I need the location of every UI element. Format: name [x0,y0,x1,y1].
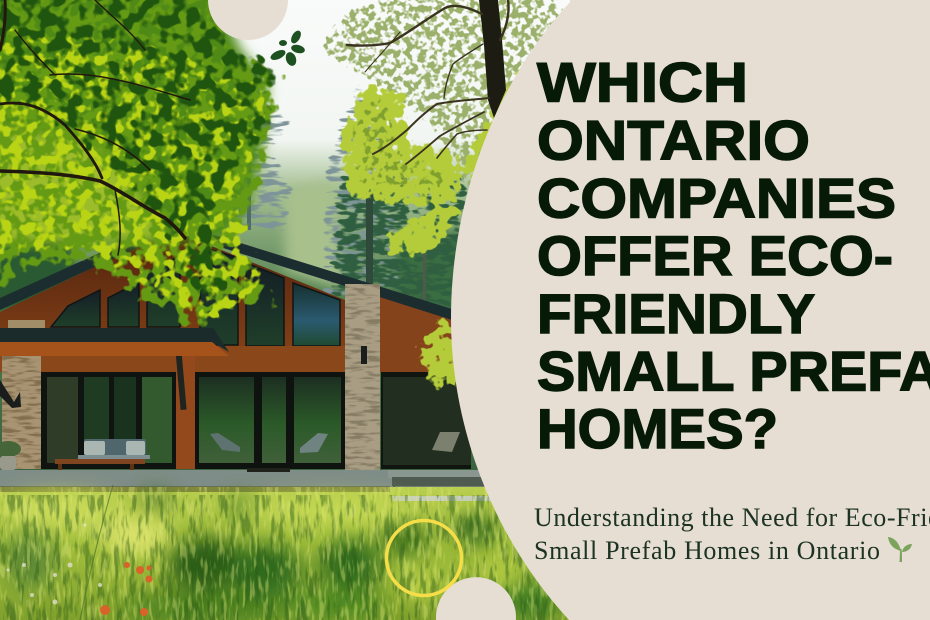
house: column bracket [175,350,187,410]
photo: sky and forest background [0,0,570,500]
house: overhang soffit [0,342,229,356]
left tree canopy [0,0,306,338]
decorative circle: top [208,0,288,40]
house: lower glass walls [41,372,471,469]
house: upper windows [51,246,340,346]
house: wood gable [0,230,345,372]
decorative yellow ring [386,520,462,596]
canopy: darker leaves [345,85,455,198]
canopy: soft under-tone [0,0,268,245]
canopy: pale upper twigs [312,0,570,200]
title: OFFER ECO- [537,225,893,287]
meadow: tall stem [80,485,113,620]
title: HOMES? [537,398,778,460]
house: roof [0,221,452,320]
patio furniture: sofa and loungers [55,432,460,474]
house [0,221,487,496]
wildflowers [6,524,152,616]
house: overhang fascia [0,328,229,352]
canopy: lime leaves [336,78,466,208]
canopy: dark leaves [0,0,285,315]
house: stone pillar left [0,355,41,469]
house: stone pillar centre [345,284,380,472]
deck [0,470,393,487]
title: FRIENDLY [537,283,815,345]
meadow [0,485,570,620]
subtitle: Small Prefab Homes in Ontario [534,536,880,565]
canopy: branches [0,0,190,255]
beige curved panel [451,0,930,620]
house: right wood wall [380,290,452,372]
canopy: leaves behind trunk [455,40,540,200]
title: COMPANIES [537,168,896,230]
meadow: shade patches [5,491,560,620]
canopy: bright leaves [0,20,280,330]
right tree trunk and branches [347,0,509,164]
meadow: path edge [392,496,502,501]
icon: seedling [888,537,912,562]
house: lower wood band [0,346,345,372]
subtitle [534,503,930,565]
house: chimney cap [8,320,45,328]
meadow: light blades [0,487,570,620]
house: wood column [176,355,195,469]
deck steps [388,470,487,496]
title: WHICH [537,52,748,114]
background conifers: centre [318,72,470,310]
doormat [247,468,290,472]
meadow: dark blades [0,495,570,620]
meadow: deck shadow strip [0,486,390,492]
title: ONTARIO [537,110,810,172]
canopy: lower leaves [376,198,468,258]
canopy: sprig of leaves at top right [269,29,306,67]
planter [0,441,21,470]
branch of leaves near right wall [412,306,470,392]
meadow: sunlit patches [5,495,522,597]
background pine: left [208,38,298,235]
right tree canopy [312,0,570,258]
meadow: base grass [0,487,570,620]
canopy: light lower area [0,125,165,242]
title [537,52,930,460]
decorative circle: bottom [436,577,516,620]
canopy: mid green leaves [0,0,290,338]
